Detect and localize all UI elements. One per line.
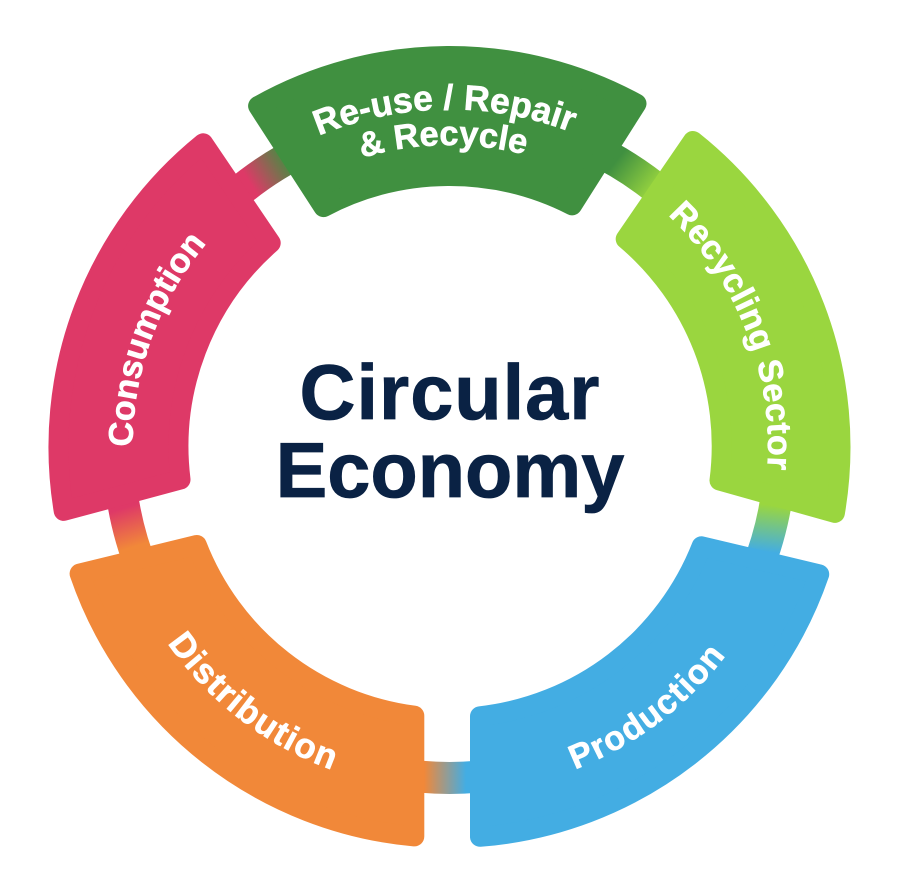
label: production: Production xyxy=(568,648,725,770)
title: circular economy: Circular xyxy=(300,350,600,436)
panel: re-use / repair and recycle xyxy=(248,46,646,218)
segment shape: green xyxy=(258,56,636,207)
segment shape: blue xyxy=(480,546,819,837)
connector: distribution to consumption xyxy=(120,476,143,571)
connector: consumption to re-use xyxy=(237,147,310,193)
connector: production to distribution xyxy=(421,777,478,778)
panel: production xyxy=(470,536,830,847)
label: recycling sector: Recycling Sector xyxy=(669,200,790,470)
segment shape: pink xyxy=(58,143,271,511)
label: consumption: Consumption xyxy=(108,235,206,446)
connector: re-use to recycling sector xyxy=(589,147,662,193)
label: distribution: Distribution xyxy=(168,630,336,770)
segment shape: orange xyxy=(80,545,414,836)
panel: consumption xyxy=(48,133,281,521)
connector: recycling sector to production xyxy=(756,476,779,571)
label: and recycle: & Recycle xyxy=(361,124,526,156)
title: circular economy xyxy=(276,350,624,514)
title: circular economy: Economy xyxy=(276,428,624,514)
segment shape: lime xyxy=(626,141,840,513)
panel: recycling sector xyxy=(616,131,850,523)
panel: distribution xyxy=(70,535,424,846)
label: re-use / repair: Re-use / Repair xyxy=(312,84,578,136)
